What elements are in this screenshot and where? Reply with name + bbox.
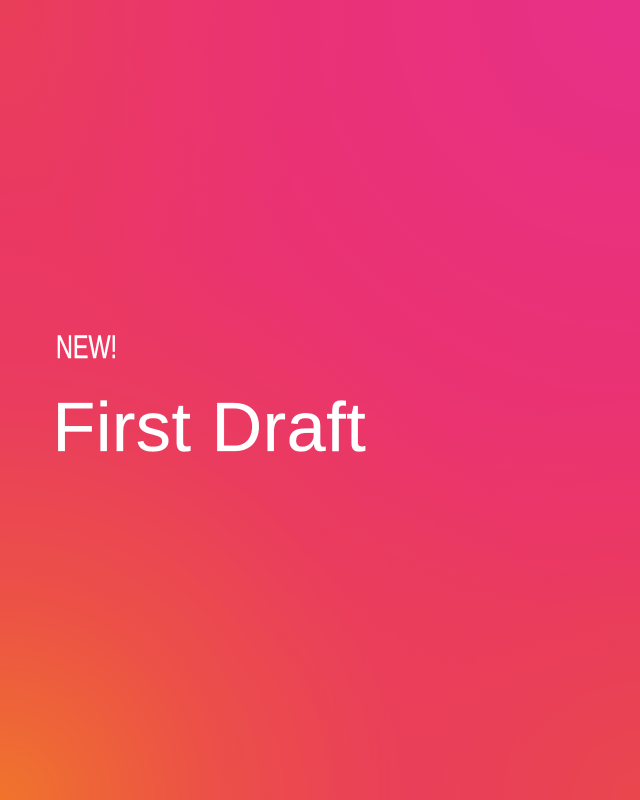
title: First Draft: First Draft [52, 388, 366, 466]
label: NEW!: NEW! [56, 329, 116, 365]
